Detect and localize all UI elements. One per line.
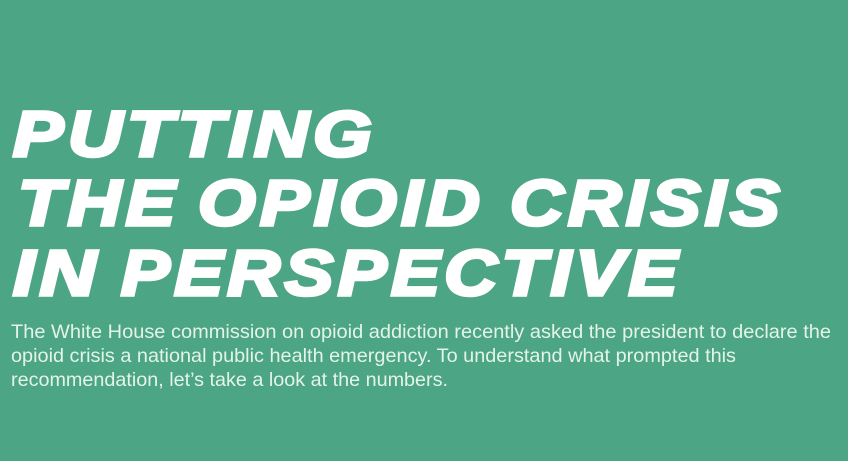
title: CRISIS: [510, 167, 784, 239]
intro text block: opioid crisis a national public health emergency. To understand what prompted this: [11, 345, 736, 367]
title: [13, 98, 784, 309]
title: OPIOID: [198, 167, 484, 239]
title: IN: [13, 238, 101, 309]
title: PERSPECTIVE: [121, 237, 682, 309]
title: PUTTING: [13, 98, 376, 170]
intro text block: [11, 321, 831, 391]
intro text block: The White House commission on opioid addiction recently asked the president to declare the: [11, 321, 831, 343]
intro text block: recommendation, let’s take a look at the numbers.: [11, 369, 448, 391]
title: THE: [18, 167, 180, 239]
